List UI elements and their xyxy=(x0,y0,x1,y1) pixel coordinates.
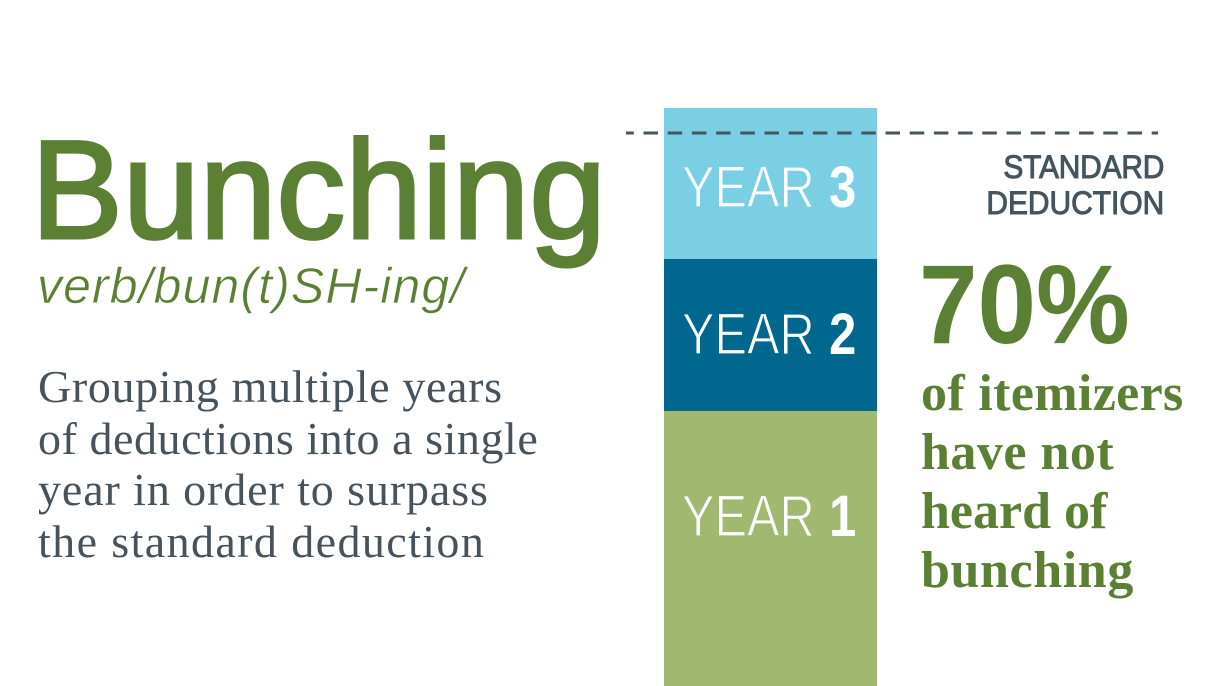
label: year 2: YEAR 2 xyxy=(682,302,856,367)
standard deduction label: DEDUCTION xyxy=(986,185,1164,221)
title: Bunching xyxy=(31,111,606,268)
statistic description: have not xyxy=(921,424,1114,481)
definition text: Grouping multiple years xyxy=(38,361,503,412)
standard deduction dashed line xyxy=(626,132,1158,134)
pronunciation: verb/bun(t)SH-ing/ xyxy=(37,258,465,314)
statistic description: bunching xyxy=(921,542,1134,599)
statistic description: heard of xyxy=(921,483,1107,540)
label: year 1: YEAR 1 xyxy=(682,484,856,549)
label: year 3: YEAR 3 xyxy=(682,155,856,220)
statistic description xyxy=(921,365,1184,599)
statistic: 70%: 70% xyxy=(919,242,1130,367)
stacked bar xyxy=(664,108,877,686)
definition text: year in order to surpass xyxy=(38,464,489,515)
statistic description: of itemizers xyxy=(921,365,1184,422)
segment: year 3 xyxy=(664,108,877,259)
segment: year 2 xyxy=(664,259,877,411)
standard deduction label: STANDARD xyxy=(1003,149,1164,185)
definition text: of deductions into a single xyxy=(38,412,538,464)
segment: year 1 xyxy=(664,411,877,686)
definition text: the standard deduction xyxy=(38,516,485,566)
standard deduction label xyxy=(986,149,1164,221)
definition text xyxy=(38,361,538,566)
